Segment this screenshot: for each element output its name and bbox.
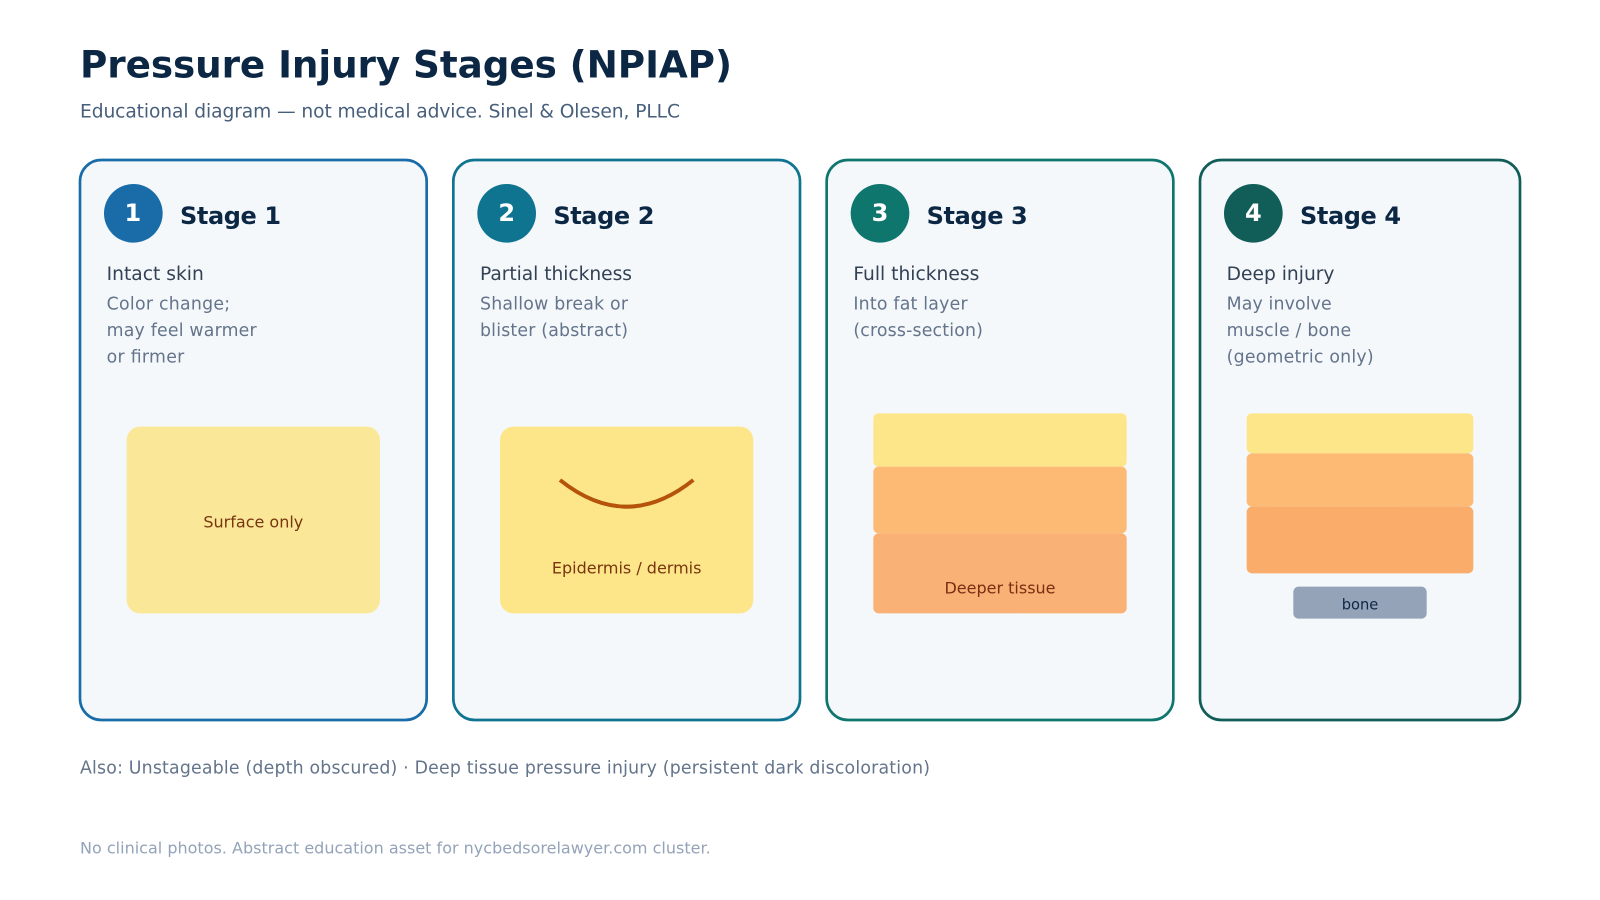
description: May involve xyxy=(1227,294,1332,314)
badge: 4 xyxy=(1224,184,1283,243)
diagram: surface skin xyxy=(127,427,380,613)
description: muscle / bone xyxy=(1227,321,1351,341)
heading: Stage 2: Stage 2 xyxy=(553,202,654,230)
description: Shallow break or xyxy=(480,294,629,314)
panel: stage 3 xyxy=(827,160,1173,720)
description: (cross-section) xyxy=(853,321,983,341)
description xyxy=(480,294,629,341)
diagram: bone: bone xyxy=(1342,596,1378,613)
description: may feel warmer xyxy=(107,321,258,341)
stage name: Deep injury xyxy=(1227,264,1334,285)
badge: 1 xyxy=(104,184,163,243)
badge: 1: 1 xyxy=(124,199,141,227)
footer: No clinical photos. Abstract education asset for nycbedsorelawyer.com cluster. xyxy=(80,838,711,857)
diagram: tissue layers xyxy=(873,413,1127,613)
description: Into fat layer xyxy=(853,294,968,314)
description xyxy=(853,294,983,341)
card background xyxy=(80,160,427,720)
stage name: Partial thickness xyxy=(480,264,632,285)
stage name: Full thickness xyxy=(853,264,979,285)
subtitle: Educational diagram — not medical advice. Sinel & Olesen, PLLC xyxy=(80,101,680,122)
panel: stage 2 xyxy=(453,160,800,720)
description xyxy=(107,294,258,368)
badge: 3 xyxy=(851,184,909,243)
description: Color change; xyxy=(107,294,230,314)
description: blister (abstract) xyxy=(480,321,628,341)
card background xyxy=(453,160,800,720)
heading: Stage 4: Stage 4 xyxy=(1300,202,1401,230)
diagram: tissue layers: Deeper tissue xyxy=(944,578,1056,597)
diagram: bone xyxy=(1293,587,1427,619)
heading: Stage 1: Stage 1 xyxy=(180,202,281,230)
diagram: shallow break xyxy=(500,427,753,613)
description: (geometric only) xyxy=(1227,348,1374,368)
diagram: shallow break: Epidermis / dermis xyxy=(552,558,701,577)
diagram: surface skin: Surface only xyxy=(203,512,303,531)
description: or firmer xyxy=(107,348,185,368)
panel: stage 1 xyxy=(80,160,427,720)
badge: 4: 4 xyxy=(1245,199,1262,227)
badge: 3: 3 xyxy=(872,199,888,227)
note: other categories: Also: Unstageable (depth obscured) · Deep tissue pressure injury (persistent dark discoloration) xyxy=(80,758,930,778)
title: Pressure Injury Stages (NPIAP) xyxy=(80,43,732,87)
diagram: deep layers xyxy=(1247,413,1473,573)
card background xyxy=(827,160,1173,720)
panel: stage 4 xyxy=(1200,160,1520,720)
description xyxy=(1227,294,1374,368)
stage name: Intact skin xyxy=(107,264,204,285)
card background xyxy=(1200,160,1520,720)
heading: Stage 3: Stage 3 xyxy=(927,202,1028,230)
badge: 2: 2 xyxy=(498,199,515,227)
badge: 2 xyxy=(477,184,536,243)
